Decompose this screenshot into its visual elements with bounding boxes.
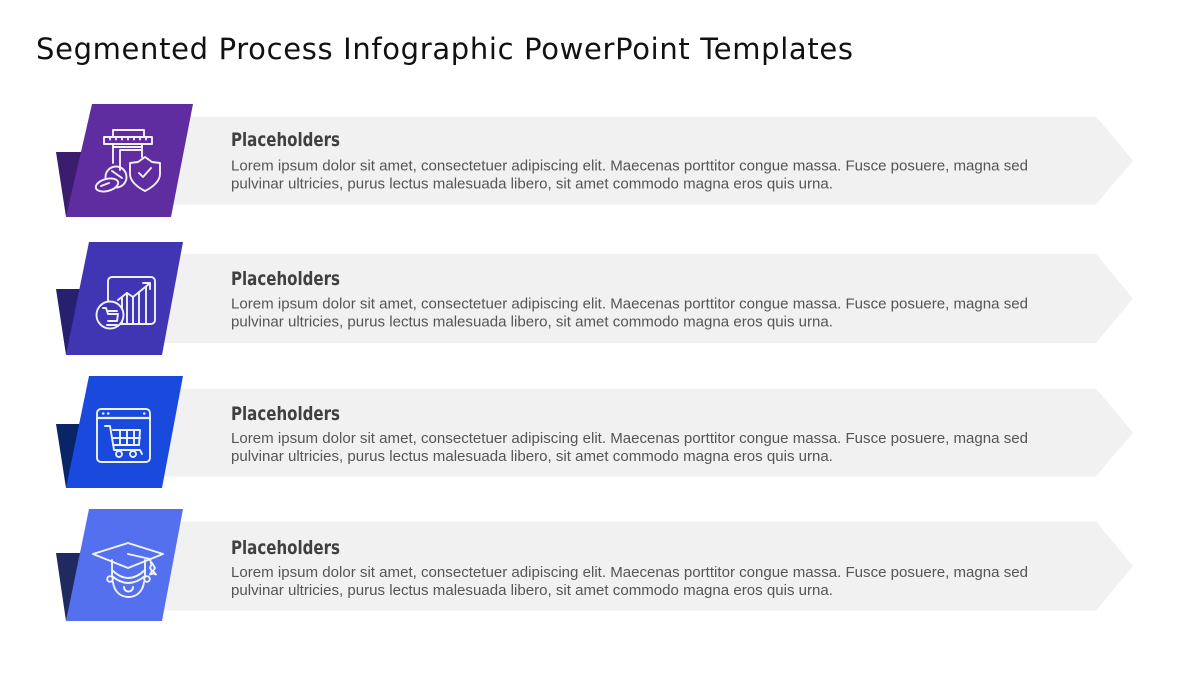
arrow band 3 — [162, 388, 1133, 476]
title: Segmented Process Infographic PowerPoint Templates — [36, 32, 853, 66]
tab 2 — [66, 242, 183, 355]
arrow band 2 — [162, 254, 1133, 343]
heading 4: Placeholders — [231, 537, 340, 559]
fold 2 — [56, 289, 82, 355]
fold 3 — [56, 424, 82, 488]
panel: step 4 — [56, 509, 1133, 621]
icon: online shopping cart — [97, 409, 150, 462]
heading 2: Placeholders — [231, 268, 340, 290]
body text 2: Lorem ipsum dolor sit amet, consectetuer adipiscing elit. Maecenas porttitor congue massa. Fusce posuere, magna sed — [231, 296, 1028, 312]
body text 3: Lorem ipsum dolor sit amet, consectetuer adipiscing elit. Maecenas porttitor congue massa. Fusce posuere, magna sed — [231, 431, 1028, 447]
icon: ruler, pills and shield — [94, 130, 160, 194]
tab 4 — [66, 509, 183, 621]
panel: step 1 — [56, 104, 1133, 217]
body text 4: Lorem ipsum dolor sit amet, consectetuer adipiscing elit. Maecenas porttitor congue massa. Fusce posuere, magna sed — [231, 565, 1028, 581]
body text 3: pulvinar ultricies, purus lectus malesuada libero, sit amet commodo magna eros quis urna. — [231, 449, 833, 465]
heading 3: Placeholders — [231, 403, 340, 425]
heading 1: Placeholders — [231, 129, 340, 151]
fold 1 — [56, 152, 84, 217]
panel: step 2 — [56, 242, 1133, 355]
arrow band 1 — [172, 116, 1133, 204]
panel: step 3 — [56, 376, 1133, 488]
body text 4: pulvinar ultricies, purus lectus malesuada libero, sit amet commodo magna eros quis urna. — [231, 583, 833, 599]
body text 1: Lorem ipsum dolor sit amet, consectetuer adipiscing elit. Maecenas porttitor congue massa. Fusce posuere, magna sed — [231, 158, 1028, 174]
arrow band 4 — [162, 522, 1133, 610]
body text 2: pulvinar ultricies, purus lectus malesuada libero, sit amet commodo magna eros quis urna. — [231, 314, 833, 330]
fold 4 — [56, 553, 82, 621]
icon: graduate with cap — [93, 543, 163, 597]
body text 1: pulvinar ultricies, purus lectus malesuada libero, sit amet commodo magna eros quis urna. — [231, 176, 833, 192]
icon: growth chart with cart — [96, 277, 155, 328]
tab 3 — [66, 376, 183, 488]
tab 1 — [66, 104, 193, 217]
